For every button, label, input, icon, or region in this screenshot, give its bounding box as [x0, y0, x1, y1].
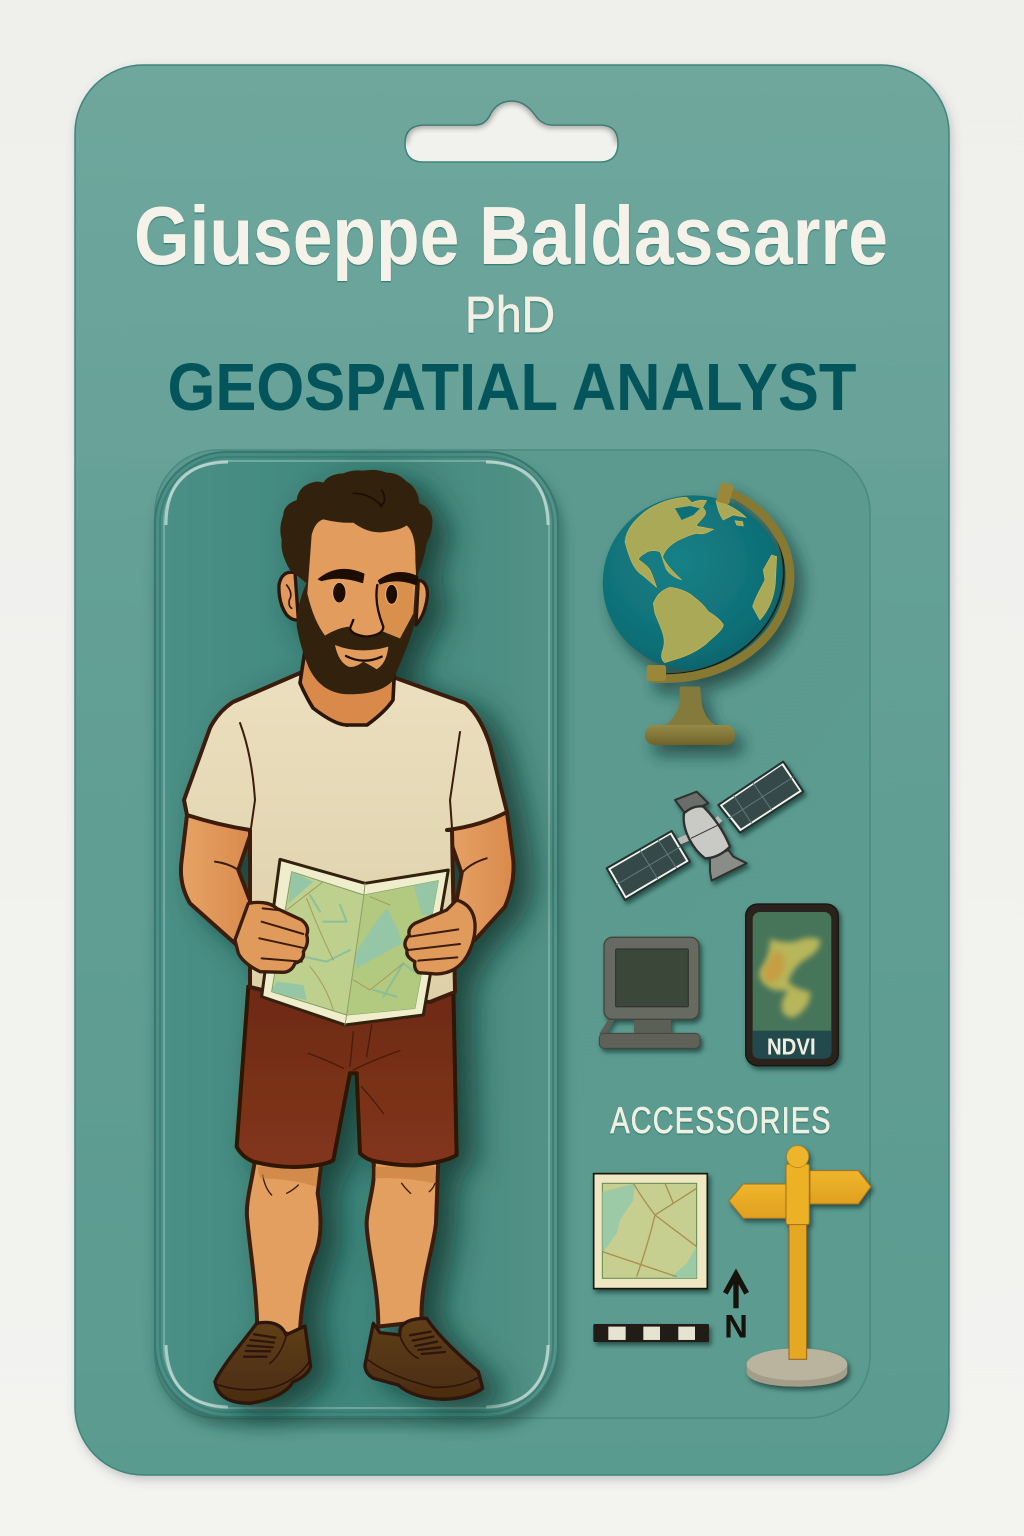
shoes	[215, 1318, 483, 1403]
ear left	[279, 572, 298, 620]
face skin	[307, 519, 416, 638]
shirt	[184, 673, 507, 1002]
shorts	[237, 987, 457, 1167]
icon: computer monitor	[599, 937, 700, 1048]
NDVI label: NDVI	[767, 1034, 816, 1060]
figure: man holding map	[181, 470, 514, 1403]
figure shadow group	[181, 470, 514, 1403]
NDVI blob	[759, 938, 820, 1017]
sleeve folds	[240, 723, 460, 828]
post sleeve	[786, 1164, 809, 1225]
icon: north arrow	[724, 1274, 748, 1345]
cheek shade	[377, 582, 413, 638]
neck	[300, 650, 395, 725]
left sign	[729, 1184, 786, 1218]
nose	[350, 585, 383, 637]
globe arm	[647, 482, 790, 681]
heading: accessories: ACCESSORIES	[610, 1101, 832, 1142]
globe base	[645, 687, 735, 745]
icon: framed map	[594, 1174, 707, 1289]
legs	[247, 1160, 438, 1337]
globe sphere	[603, 495, 784, 670]
panel: clear bubble	[155, 452, 562, 1426]
icon: signpost	[729, 1146, 871, 1387]
eyes	[333, 582, 398, 604]
satellite body	[675, 792, 747, 881]
hands	[235, 900, 475, 974]
left hand	[235, 902, 308, 972]
title: role: GEOSPATIAL ANALYST	[168, 350, 857, 425]
right hand	[405, 900, 475, 974]
head	[279, 470, 432, 694]
icon: satellite	[607, 762, 803, 900]
right sign	[810, 1171, 871, 1204]
hang hole	[405, 101, 618, 162]
icon: globe	[603, 482, 790, 745]
hair curls	[353, 490, 385, 506]
hair and beard	[280, 470, 432, 694]
ear right	[416, 580, 427, 625]
solar panels	[607, 762, 803, 900]
icon: phone with NDVI map	[746, 904, 838, 1066]
signpost pole	[789, 1223, 807, 1359]
card body	[75, 65, 949, 1475]
icon: north arrow: N	[724, 1308, 748, 1345]
folded map	[262, 859, 448, 1025]
title: degree: PhD	[465, 286, 555, 343]
arms	[181, 812, 514, 945]
icon: scale bar	[593, 1324, 709, 1342]
map terrain	[272, 872, 440, 1015]
right shoe	[365, 1318, 483, 1399]
eyebrows	[318, 569, 418, 585]
panel: blister backing	[155, 450, 870, 1418]
panel: blister card	[75, 65, 949, 1475]
mouth	[335, 645, 388, 669]
signpost base	[747, 1348, 847, 1387]
left shoe	[215, 1322, 311, 1403]
title: name: Giuseppe Baldassarre	[134, 189, 888, 282]
post knob	[787, 1146, 809, 1168]
